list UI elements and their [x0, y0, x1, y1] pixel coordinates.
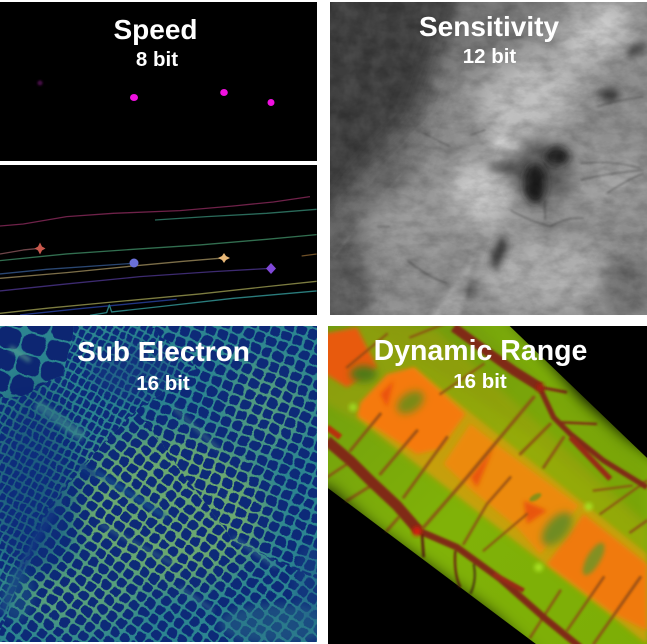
sensitivity grayscale image [330, 2, 647, 315]
heading: Sub Electron: Sub Electron [77, 336, 250, 367]
subheading: 8 bit: 8 bit [136, 48, 178, 71]
heading: Dynamic Range: Dynamic Range [374, 335, 587, 367]
subheading: 12 bit: 12 bit [463, 45, 516, 68]
panel: sub electron [0, 317, 333, 644]
panel: speed [0, 2, 317, 315]
speed upper image: magenta dots [0, 2, 317, 161]
panel: sensitivity [330, 2, 647, 315]
heading: Sensitivity: Sensitivity [419, 11, 559, 42]
sub electron cell micrograph [0, 317, 333, 644]
dynamic range fluorescence image [328, 326, 647, 644]
subheading: 16 bit: 16 bit [453, 370, 507, 393]
panel: dynamic range [328, 326, 647, 644]
heading: Speed: Speed [113, 14, 198, 45]
speed lower image: particle tracks [0, 165, 317, 315]
subheading: 16 bit: 16 bit [136, 372, 190, 395]
